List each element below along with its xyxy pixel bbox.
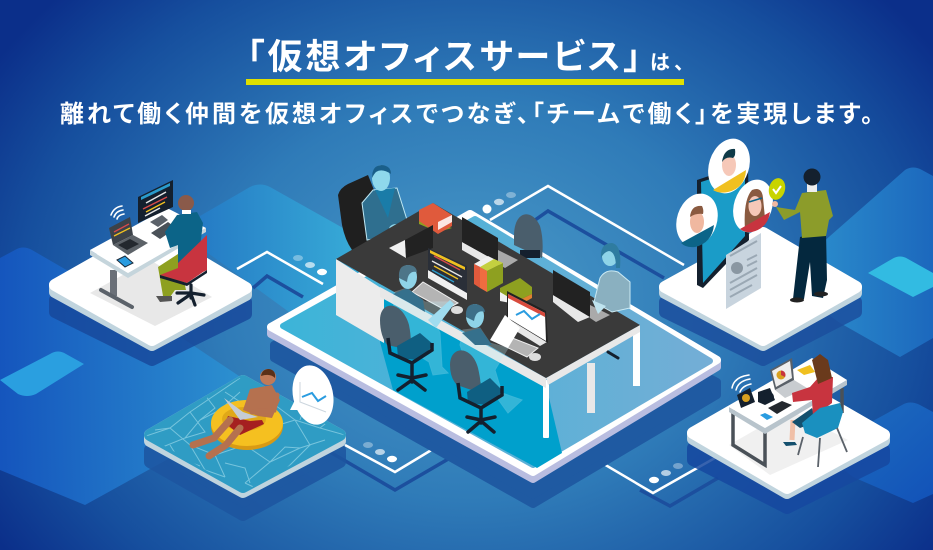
panel: central tablet [271,214,717,504]
avatar: woman with glasses [727,174,779,238]
wifi icon [732,375,751,392]
tablet screen [283,219,710,465]
colour swatches [797,365,815,375]
man on ring [193,369,280,456]
desk top [336,203,640,378]
desk leg [101,270,132,307]
phone [760,413,773,420]
profile document [726,233,761,309]
mouse 1 [451,306,463,314]
manager chair [338,175,380,250]
monitor [138,180,173,227]
person at desk [156,195,207,305]
wifi icon [111,206,124,219]
phone / profile screen [697,163,749,288]
monitor B [462,217,498,266]
keyboard [151,222,176,239]
panel: lower right platform [693,354,884,508]
monitor C [553,270,590,322]
floor shadow [729,410,848,475]
heading underline [246,79,684,85]
area under desk [380,296,562,468]
chair base under desk [608,352,618,358]
tablet [737,388,755,408]
keyboard 2 [498,337,538,357]
tablet shadow [274,250,717,504]
water pattern [143,378,345,490]
woman [783,354,847,467]
graphics pad [768,401,792,414]
laptop [109,217,148,255]
camera [758,388,775,405]
tablet lip [271,214,717,479]
floor mat [90,260,212,326]
keyboard C [590,305,610,322]
translucent person right [592,243,630,314]
standing man [772,168,833,302]
desk top [90,228,206,278]
desk pedestal [336,259,384,343]
panel: pool platform [143,361,345,515]
keyboard 1 [412,282,458,310]
keyboard B [498,250,518,268]
inflatable ring [211,400,283,450]
check bubble [766,176,788,202]
avatar: man in blue [670,188,724,252]
connector: bottom left line [330,437,453,490]
desk top [729,380,847,434]
rear chair [514,214,543,258]
translucent manager [362,165,408,240]
tablet frame [271,214,717,472]
heading line one: 「仮想オフィスサービス」 [247,38,641,77]
phone [117,256,133,267]
connector: bottom right line [580,450,722,506]
code monitor [428,248,467,300]
avatar: man in yellow [701,133,757,199]
desk legs [543,330,640,438]
red chair [160,235,207,283]
title [60,38,873,128]
panel: left desk platform [55,180,246,360]
laptop [770,358,807,398]
panel: right top platform [665,133,856,360]
office desk scene [336,165,640,438]
desk frame [733,388,842,465]
translucent person front [460,304,522,413]
connector: top right line [482,186,684,278]
office chair front left [380,306,434,390]
mouse 2 [529,353,541,361]
held document [490,315,520,348]
background diamonds [0,168,933,505]
connector: left line [237,252,327,297]
laptop back left [389,240,406,258]
chart monitor [507,291,548,346]
office chair front right [450,350,503,432]
subheading: 離れて働く仲間を仮想オフィスでつなぎ、「チームで働く」を実現します。 [60,100,873,128]
speech bubble chart [287,361,339,429]
translucent person left [392,265,454,375]
books middle [474,256,532,307]
heading suffix: は、 [650,52,684,74]
stack of books top [419,203,452,234]
monitor A [405,225,433,258]
